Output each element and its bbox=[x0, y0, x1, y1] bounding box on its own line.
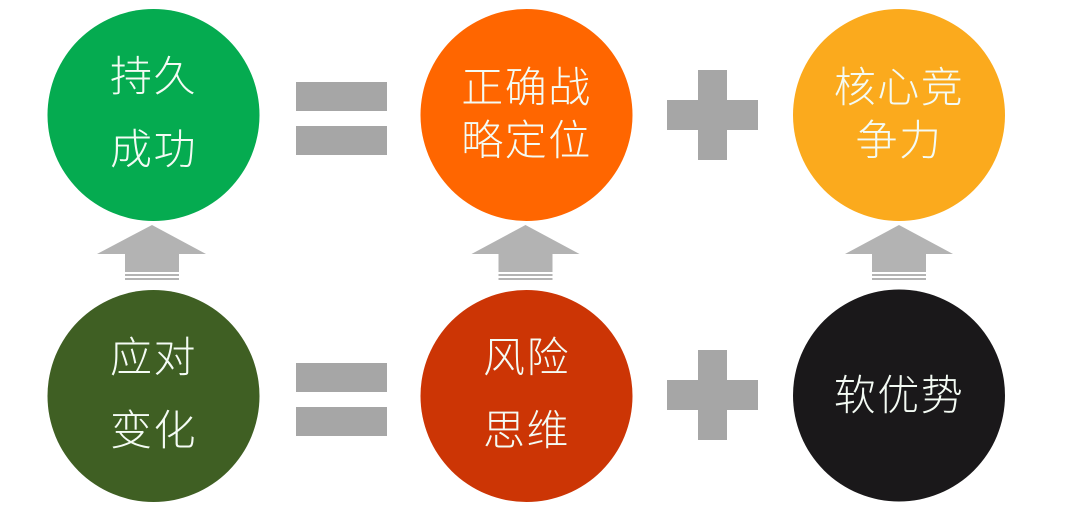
circle: 持久成功: 成功 bbox=[110, 128, 197, 174]
icon: plus sign top bbox=[667, 70, 758, 160]
circle: 正确战略定位 bbox=[420, 9, 632, 221]
circle: 应对变化: 应对 bbox=[110, 336, 197, 382]
arrow: left up bbox=[97, 225, 206, 280]
circle: 持久成功 bbox=[48, 9, 260, 221]
circle: 核心竞争力: 争力 bbox=[855, 119, 943, 165]
circle: 核心竞争力 bbox=[793, 9, 1005, 221]
arrow: middle up bbox=[472, 225, 580, 280]
icon: equals sign top bbox=[296, 82, 387, 155]
circle: 持久成功: 持久 bbox=[110, 55, 197, 101]
icon: plus sign bottom bbox=[667, 350, 758, 440]
circle: 软优势 bbox=[793, 290, 1005, 502]
circle: 正确战略定位: 正确战 bbox=[461, 66, 592, 112]
circle: 风险思维: 风险 bbox=[483, 336, 570, 382]
circle: 风险思维 bbox=[420, 290, 632, 502]
icon: equals sign bottom bbox=[296, 363, 387, 436]
circle: 应对变化: 变化 bbox=[110, 409, 197, 455]
circle: 软优势: 软优势 bbox=[834, 374, 964, 420]
circle: 核心竞争力: 核心竞 bbox=[834, 66, 964, 112]
circle: 应对变化 bbox=[48, 290, 260, 502]
circle: 正确战略定位: 略定位 bbox=[461, 119, 592, 165]
circle: 风险思维: 思维 bbox=[483, 409, 570, 455]
arrow: right up bbox=[845, 225, 953, 280]
